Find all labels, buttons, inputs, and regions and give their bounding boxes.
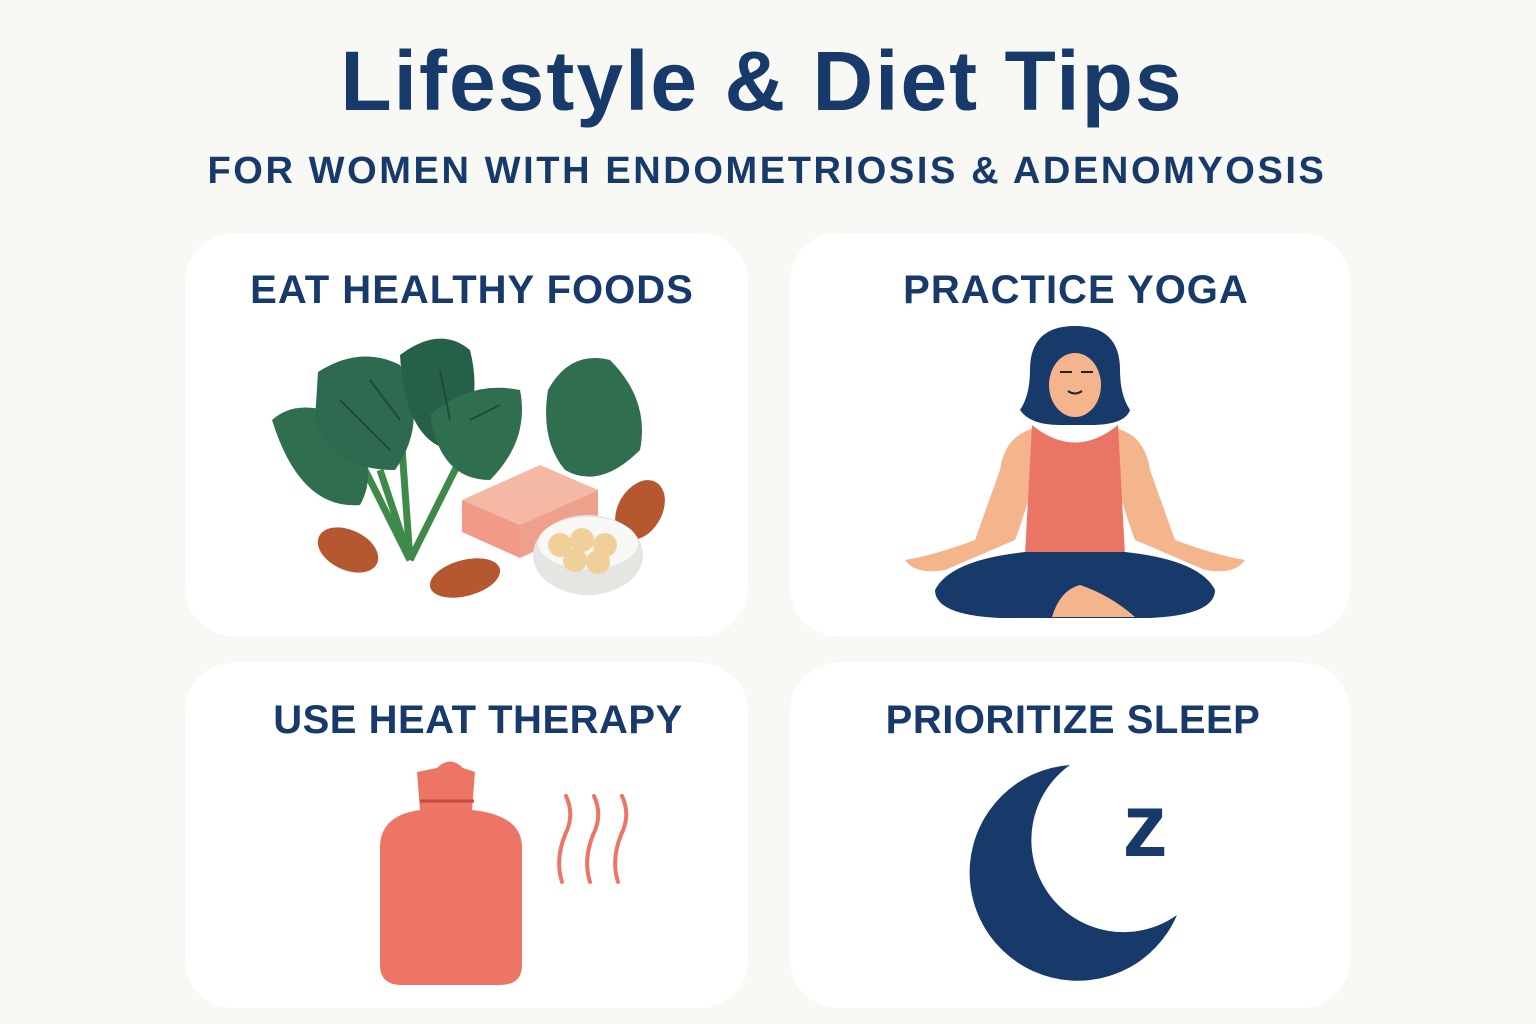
icon: z letter: z: [1122, 776, 1168, 876]
subtitle: FOR WOMEN WITH ENDOMETRIOSIS & ADENOMYOSIS: [207, 150, 1327, 192]
icon: hot water bottle: [380, 762, 522, 985]
icon: almonds: [311, 471, 675, 605]
panel: use heat therapy: [185, 663, 748, 1008]
icon: moon: [970, 765, 1177, 981]
icon: meditating woman: [905, 326, 1245, 618]
heading: use heat therapy: USE HEAT THERAPY: [273, 698, 683, 742]
heading: eat healthy foods: EAT HEALTHY FOODS: [250, 268, 694, 312]
title: Lifestyle & Diet Tips: [340, 34, 1184, 128]
icon: spinach leaves: [272, 339, 642, 560]
heading: prioritize sleep: PRIORITIZE SLEEP: [886, 698, 1260, 742]
panel: eat healthy foods: [185, 233, 748, 636]
panel: prioritize sleep: [790, 663, 1350, 1008]
panel: practice yoga: [790, 233, 1350, 636]
icon: heat waves: [559, 796, 626, 882]
icon: bowl of chickpeas: [533, 515, 643, 595]
icon: tofu block: [462, 465, 598, 558]
heading: practice yoga: PRACTICE YOGA: [903, 268, 1249, 312]
